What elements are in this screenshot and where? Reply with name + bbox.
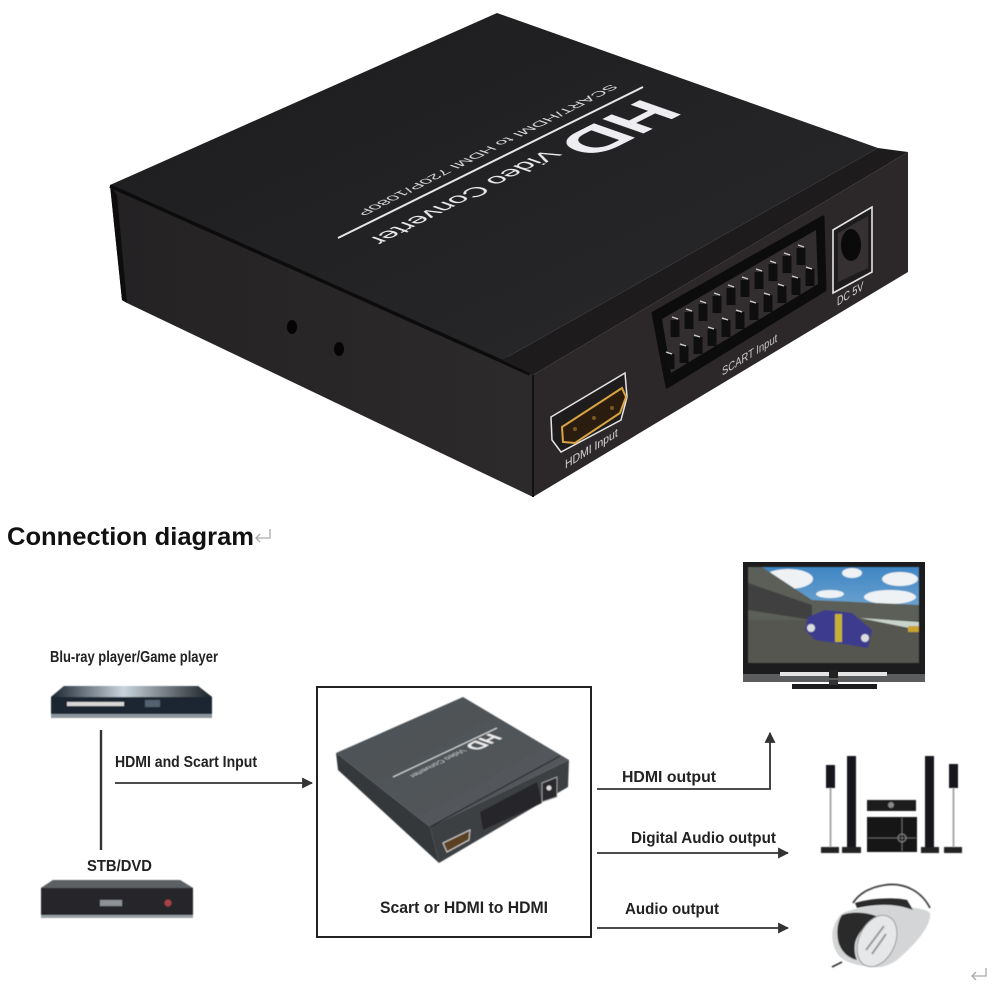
- icon: Blu-ray player: [51, 686, 212, 718]
- icon: headphones: [832, 884, 930, 973]
- lid edge shadow: [110, 186, 530, 374]
- box front strip: [502, 148, 908, 375]
- icon: television with racing game: [743, 562, 925, 689]
- input arrow: [115, 782, 312, 784]
- box front face: [533, 152, 908, 497]
- source label: STB/DVD: STB/DVD: [87, 858, 152, 875]
- subwoofer: [867, 817, 917, 852]
- label: SCART Input: SCART Input: [722, 330, 778, 379]
- output label: Audio: Audio output: [625, 901, 720, 918]
- small converter illustration: HD: [459, 731, 507, 752]
- box top plate: [110, 13, 878, 360]
- small converter illustration: Video Converter: [406, 748, 469, 778]
- printed rule on lid: [338, 87, 643, 238]
- heading: Connection diagram: Connection diagram: [7, 523, 254, 551]
- icon: set-top box: [41, 880, 193, 918]
- label: HDMI Input: HDMI Input: [565, 425, 618, 472]
- output label: Digital Audio: Digital Audio output: [631, 830, 777, 847]
- AV receiver: [867, 800, 916, 811]
- front corner highlight: [532, 375, 534, 497]
- DC 5V jack: [833, 207, 872, 293]
- TV stand: [792, 684, 877, 689]
- panel caption: Scart or HDMI to HDMI: [380, 899, 548, 917]
- right small speaker: [944, 764, 962, 853]
- lid text: Video Converter: Video Converter: [362, 147, 567, 247]
- lid text: HD logo: HD: [539, 93, 697, 163]
- icon: home theatre speakers: [821, 756, 962, 853]
- left small speaker: [821, 765, 839, 853]
- icon: return mark bottom right: [972, 968, 986, 980]
- small converter illustration: [336, 697, 569, 863]
- box side face: [110, 185, 533, 497]
- HDMI socket: [551, 373, 627, 452]
- product photo: HD video converter box: [110, 13, 908, 497]
- side mounting holes: [287, 320, 344, 356]
- side face rear lip: [110, 185, 127, 303]
- right tower: [921, 756, 939, 853]
- label: DC 5V: DC 5V: [837, 279, 863, 309]
- output label: HDMI: HDMI output: [622, 769, 717, 786]
- source: STB/DVD: [41, 858, 193, 918]
- output arrow: [597, 852, 788, 854]
- SCART socket: [653, 217, 825, 387]
- connector line between sources: [100, 730, 102, 850]
- panel frame: [317, 687, 591, 937]
- source label: Blu-ray: Blu-ray player/Game player: [50, 649, 218, 666]
- TV light bar: [780, 672, 887, 676]
- TV bezel: [743, 562, 925, 682]
- source: Blu-ray player: [50, 649, 218, 718]
- output arrow: [597, 927, 788, 929]
- lid text: model description: SCART/HDMI to HDMI 720P/1080P: [353, 83, 622, 217]
- TV screen: [748, 567, 919, 663]
- left tower: [842, 756, 861, 853]
- input label: HDMI and Scart Input: [115, 754, 258, 771]
- icon: return mark after heading: [256, 529, 270, 542]
- panel: converter box: [317, 687, 591, 937]
- output elbow arrow: [597, 733, 770, 789]
- arrow: HDMI output: [597, 733, 770, 789]
